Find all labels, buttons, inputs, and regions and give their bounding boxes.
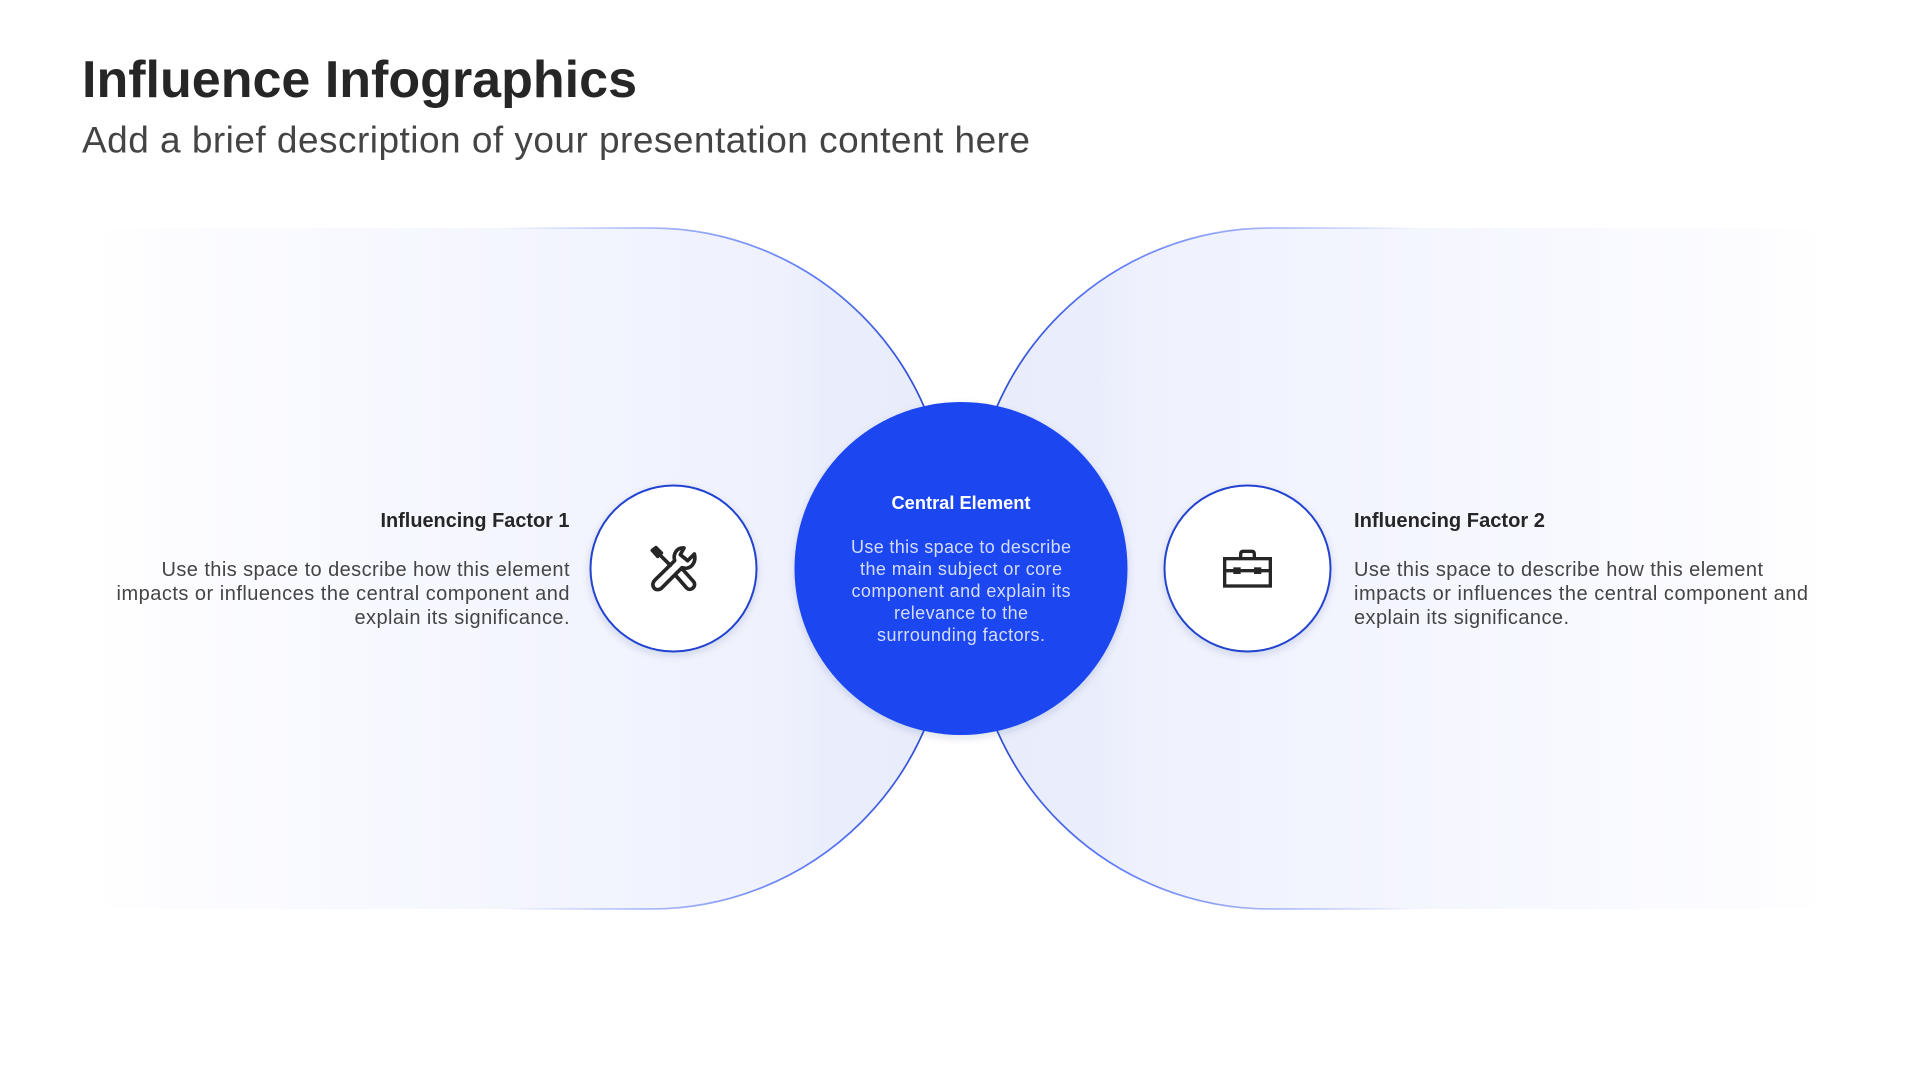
central description: Use this space to describe: [851, 537, 1071, 557]
factor 1 text: [116, 510, 570, 629]
factor 1 description: [116, 559, 570, 629]
central description: relevance to the: [894, 603, 1028, 623]
central description: the main subject or core: [860, 559, 1062, 579]
factor 2 description: [1354, 559, 1808, 629]
panel: right influence shape: [972, 228, 1825, 909]
subtitle: Add a brief description of your presentation content here: [82, 120, 1030, 160]
icon: tools: [652, 548, 695, 590]
factor 1 circle with icon: [590, 486, 756, 652]
factor 1 description: impacts or influences the central component and: [116, 583, 570, 605]
icon: briefcase: [1225, 551, 1270, 586]
central description: surrounding factors.: [877, 625, 1045, 645]
factor 2 description: explain its significance.: [1354, 607, 1569, 629]
factor 2 circle with icon: [1164, 486, 1330, 652]
factor 2 description: Use this space to describe how this element: [1354, 559, 1763, 581]
central heading: Central Element: [892, 493, 1030, 513]
central description: [851, 537, 1071, 645]
factor 1 heading: Influencing Factor 1: [380, 510, 570, 532]
panel: left influence shape: [95, 228, 949, 909]
factor 1 description: Use this space to describe how this element: [162, 559, 570, 581]
factor 2 text: [1354, 510, 1808, 629]
factor 2 heading: Influencing Factor 2: [1354, 510, 1545, 532]
central description: component and explain its: [852, 581, 1070, 601]
central element circle: [794, 402, 1128, 735]
factor 2 description: impacts or influences the central component and: [1354, 583, 1808, 605]
title: Influence Infographics: [82, 51, 637, 109]
factor 1 description: explain its significance.: [354, 607, 570, 629]
